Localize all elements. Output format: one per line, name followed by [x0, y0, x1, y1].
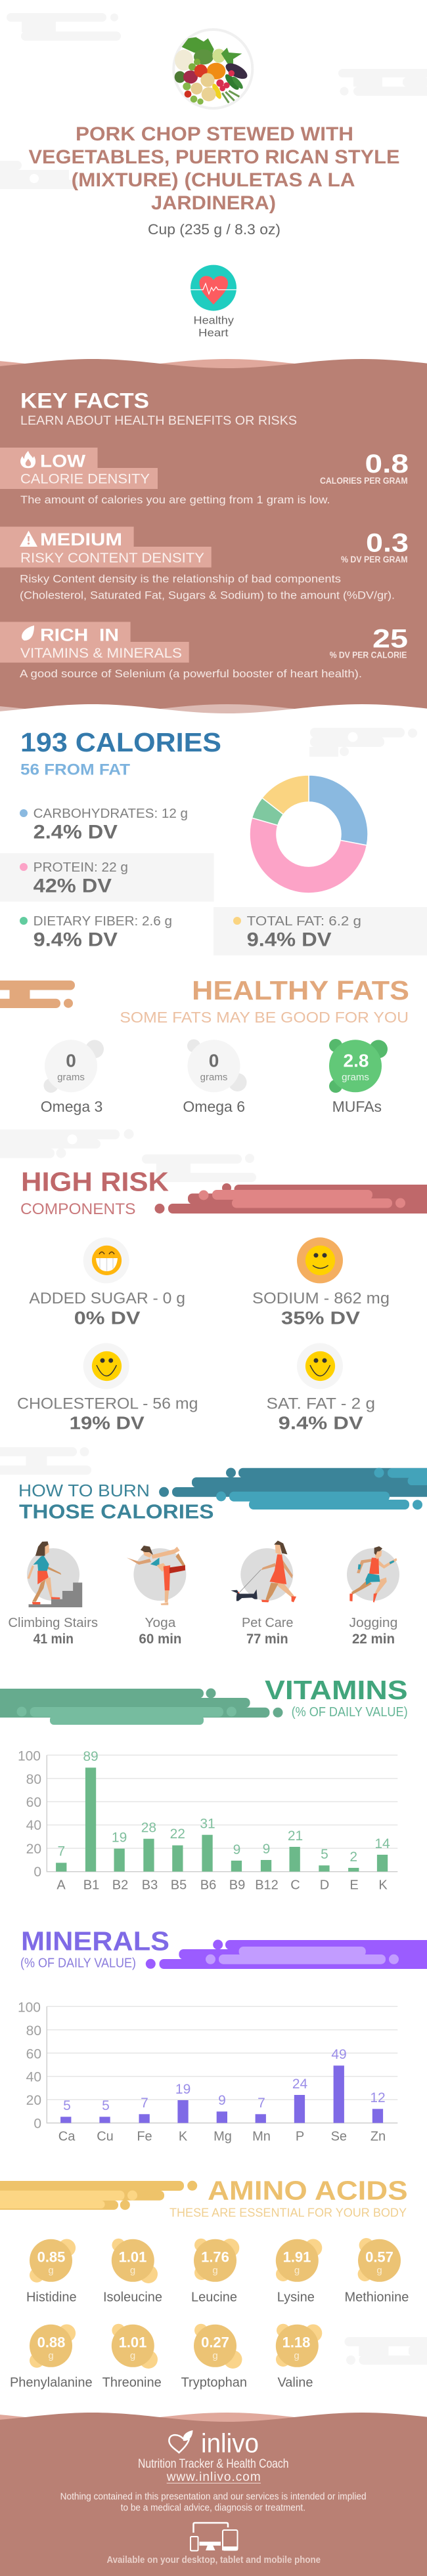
omega 3	[41, 1040, 104, 1115]
legend: total fat	[214, 907, 427, 956]
heading: KEY FACTS	[20, 389, 149, 412]
activity: climbing stairs	[8, 1542, 98, 1647]
title: VEGETABLES, PUERTO RICAN STYLE	[29, 146, 399, 168]
healthy fats subheading: SOME FATS MAY BE GOOD FOR YOU	[120, 1009, 409, 1026]
icon: devices	[191, 2523, 238, 2550]
MUFAs: 2.8	[344, 1050, 369, 1070]
legend: total fat: TOTAL FAT: 6.2 g	[247, 914, 361, 929]
amino acid: methionine: Methionine	[344, 2291, 409, 2305]
omega 6: Omega 6	[183, 1098, 245, 1115]
healthy fats heading: HEALTHY FATS	[192, 975, 409, 1005]
risk: sodium	[252, 1237, 390, 1328]
activity: jogging: 22 min	[352, 1632, 395, 1647]
bar chart: vitamins: 19	[112, 1830, 127, 1846]
bar chart: vitamins: 89	[83, 1749, 99, 1764]
amino acid: valine: Valine	[277, 2376, 313, 2390]
bar chart: vitamins: 2	[349, 1849, 357, 1865]
bar chart: minerals: 0	[34, 2116, 41, 2131]
bar chart: vitamins: 40	[26, 1818, 41, 1833]
burn calories banner shape	[159, 1467, 427, 1510]
tagline: Nutrition Tracker & Health Coach	[138, 2457, 289, 2471]
panel: key facts	[0, 359, 427, 722]
risk: saturated fat	[267, 1343, 375, 1433]
food image	[173, 30, 252, 108]
high risk banner shape	[155, 1183, 427, 1214]
fact: risky content density: (Cholesterol, Saturated Fat, Sugars & Sodium) to the amount (%DV/gr).	[20, 589, 395, 601]
risk: sodium: SODIUM - 862 mg	[252, 1290, 390, 1307]
activity: jogging: Jogging	[349, 1616, 397, 1630]
legend: dietary fiber	[20, 914, 172, 950]
disclaimer: Nothing contained in this presentation and our services is intended or implied	[60, 2491, 367, 2502]
activity: yoga	[127, 1546, 186, 1647]
bar chart: minerals: Cu	[97, 2130, 114, 2144]
badge label: Heart	[198, 327, 229, 339]
legend: total fat: 9.4% DV	[247, 929, 332, 950]
amino acid: histidine: Histidine	[26, 2291, 77, 2305]
amino acid: threonine: Threonine	[102, 2376, 162, 2390]
amino acid: methionine: g	[376, 2265, 382, 2276]
bar chart: minerals: 49	[331, 2047, 347, 2062]
bar chart: minerals: 80	[26, 2023, 41, 2038]
activity: yoga: 60 min	[139, 1632, 181, 1647]
activity: pet care: Pet Care	[242, 1616, 293, 1630]
risk: sodium: 35% DV	[281, 1307, 360, 1328]
vitamins subheading: (% OF DAILY VALUE)	[292, 1705, 408, 1720]
legend: dietary fiber: DIETARY FIBER: 2.6 g	[34, 914, 172, 929]
fact: risky content density: Risky Content density is the relationship of bad components	[20, 572, 341, 585]
fact: risky content density: % DV PER GRAM	[341, 555, 408, 564]
bar chart: vitamins: B2	[112, 1878, 128, 1892]
fact: rich in vitamins and minerals: 25	[372, 624, 408, 653]
fact: calorie density: LOW	[40, 451, 86, 471]
risk: added sugar: 0% DV	[74, 1307, 141, 1328]
amino acids subheading: THESE ARE ESSENTIAL FOR YOUR BODY	[169, 2205, 407, 2219]
amino acid: tryptophan	[181, 2324, 247, 2390]
amino acid: isoleucine: 1.01	[119, 2249, 146, 2266]
serving size: Cup (235 g / 8.3 oz)	[148, 221, 281, 238]
bar chart: minerals: 7	[141, 2096, 148, 2111]
bar chart: minerals: 12	[370, 2090, 386, 2105]
bar chart: vitamins: 28	[141, 1821, 156, 1835]
amino acid: tryptophan: 0.27	[201, 2334, 229, 2351]
bar chart: vitamins: 7	[57, 1844, 65, 1859]
bar chart: vitamins: 21	[288, 1828, 303, 1844]
bar chart: vitamins: B6	[200, 1878, 216, 1892]
amino acid: isoleucine: Isoleucine	[103, 2291, 162, 2305]
bar chart: vitamins: B12	[255, 1878, 279, 1892]
amino acid: leucine	[191, 2239, 239, 2305]
bar chart: minerals: 5	[63, 2098, 71, 2113]
burn calories heading: THOSE CALORIES	[19, 1500, 214, 1523]
bar chart: vitamins: B9	[229, 1878, 245, 1892]
fact: risky content density: 0.3	[366, 529, 409, 558]
activity: jogging	[347, 1546, 399, 1647]
fact: calorie density: The amount of calories you are getting from 1 gram is low.	[20, 494, 330, 506]
bar chart: vitamins: B3	[142, 1878, 158, 1892]
fact: calorie density: CALORIES PER GRAM	[320, 476, 408, 486]
bar chart: minerals: Mn	[252, 2130, 271, 2144]
bar chart: minerals: 100	[18, 2000, 41, 2016]
risk: cholesterol: 19% DV	[70, 1412, 145, 1433]
risk: added sugar	[29, 1237, 185, 1328]
amino acid: histidine	[26, 2239, 77, 2305]
badge label	[193, 315, 235, 339]
risk: cholesterol	[17, 1343, 198, 1433]
bar chart: vitamins: 80	[26, 1772, 41, 1787]
amino acid: lysine	[276, 2239, 322, 2305]
amino acid: leucine: 1.76	[201, 2249, 229, 2266]
MUFAs	[329, 1039, 388, 1115]
disclaimer: to be a medical advice, diagnosis or treatment.	[121, 2502, 305, 2513]
activity: yoga: Yoga	[145, 1616, 176, 1630]
amino acid: histidine: g	[48, 2265, 54, 2276]
amino acid: valine: g	[294, 2350, 300, 2361]
amino acid: leucine: Leucine	[191, 2291, 237, 2305]
amino acid: phenylalanine: g	[48, 2350, 54, 2361]
bar chart: minerals: K	[179, 2130, 188, 2144]
calories heading: 193 CALORIES	[20, 727, 221, 757]
fact: rich in vitamins and minerals: % DV PER CALORIE	[330, 650, 407, 660]
amino acid: threonine: g	[130, 2350, 135, 2361]
amino acids heading: AMINO ACIDS	[208, 2176, 408, 2206]
bar chart: minerals: Se	[331, 2130, 347, 2144]
availability note: Available on your desktop, tablet and mobile phone	[106, 2554, 321, 2565]
amino acid: isoleucine	[103, 2239, 162, 2305]
bar chart: vitamins	[18, 1749, 397, 1892]
fact: rich in vitamins and minerals: VITAMINS & MINERALS	[20, 646, 182, 661]
amino acid: lysine: Lysine	[277, 2291, 315, 2305]
minerals heading: MINERALS	[21, 1926, 169, 1956]
risk: cholesterol: CHOLESTEROL - 56 mg	[17, 1395, 198, 1412]
burn calories heading: HOW TO BURN	[18, 1481, 150, 1500]
vitamins heading: VITAMINS	[265, 1675, 408, 1705]
amino acid: tryptophan: Tryptophan	[181, 2376, 247, 2390]
bar chart: minerals: Zn	[371, 2130, 386, 2144]
activity: climbing stairs: 41 min	[34, 1632, 74, 1647]
activity: pet care	[231, 1540, 296, 1647]
high risk subheading: COMPONENTS	[20, 1200, 135, 1218]
figure: woman in yoga pose	[127, 1546, 185, 1605]
bar chart: vitamins: B1	[83, 1878, 99, 1892]
bar chart: minerals: 9	[218, 2093, 226, 2108]
title	[29, 123, 399, 214]
fact: calorie density: CALORIE DENSITY	[20, 471, 150, 486]
title: (MIXTURE) (CHULETAS A LA	[72, 169, 355, 191]
calories from fat: 56 FROM FAT	[20, 761, 130, 779]
bar chart: vitamins: E	[349, 1878, 359, 1892]
figure: man jogging	[349, 1546, 397, 1603]
amino acid: methionine	[344, 2238, 409, 2305]
legend: carbohydrates	[20, 806, 188, 843]
amino acid: phenylalanine: Phenylalanine	[10, 2376, 93, 2390]
bar chart: minerals: Ca	[58, 2130, 76, 2144]
legend: protein	[0, 853, 214, 902]
bar chart: vitamins: 22	[170, 1826, 185, 1842]
amino acid: threonine: 1.01	[119, 2334, 146, 2351]
amino acid: methionine: 0.57	[365, 2249, 393, 2266]
omega 6	[183, 1040, 247, 1115]
website: www.inlivo.com	[166, 2470, 261, 2484]
omega 6: 0	[209, 1050, 219, 1070]
bar chart: vitamins: 20	[26, 1842, 41, 1857]
badge label: Healthy	[193, 315, 235, 327]
title: JARDINERA)	[151, 192, 276, 214]
minerals banner shape	[146, 1940, 427, 1969]
legend: protein: 42% DV	[34, 875, 112, 897]
bar chart: vitamins: A	[56, 1878, 66, 1892]
logo wordmark: inlivo	[201, 2428, 259, 2459]
figure: woman walking dog	[231, 1540, 296, 1602]
amino acid: lysine: 1.91	[283, 2249, 311, 2266]
omega 3: Omega 3	[41, 1098, 102, 1115]
icon: warning	[20, 531, 37, 547]
logo: inlivo heart and leaf	[169, 2430, 193, 2453]
amino acids banner shape	[0, 2181, 197, 2210]
fact: rich in vitamins and minerals	[0, 622, 408, 680]
bar chart: vitamins: 0	[34, 1865, 41, 1880]
healthy fats banner shape	[0, 981, 75, 1008]
bar chart: minerals: 40	[26, 2070, 41, 2085]
icon: flame	[20, 451, 35, 468]
bar chart: vitamins: D	[320, 1878, 329, 1892]
bar chart: minerals: Mg	[214, 2130, 232, 2144]
bar chart: vitamins: 14	[374, 1836, 390, 1851]
MUFAs: MUFAs	[332, 1098, 382, 1115]
title: PORK CHOP STEWED WITH	[76, 123, 353, 145]
bar chart: vitamins: 31	[200, 1817, 215, 1831]
bar chart: minerals	[18, 2000, 397, 2144]
risk: saturated fat: SAT. FAT - 2 g	[267, 1395, 375, 1412]
bar chart: vitamins: 9	[263, 1842, 270, 1857]
legend: protein: PROTEIN: 22 g	[34, 860, 128, 875]
bar chart: vitamins: 9	[233, 1842, 240, 1857]
disclaimer	[60, 2491, 367, 2513]
bar chart: minerals: 5	[102, 2098, 110, 2113]
fact: rich in vitamins and minerals: RICH IN	[40, 625, 119, 644]
icon: leaf	[22, 625, 34, 641]
activity: climbing stairs: Climbing Stairs	[8, 1616, 98, 1630]
amino acid: tryptophan: g	[212, 2350, 218, 2361]
fact: risky content density: RISKY CONTENT DENSITY	[20, 551, 204, 566]
donut chart	[250, 775, 368, 893]
panel: footer	[0, 2413, 427, 2576]
bar chart: vitamins: C	[290, 1878, 300, 1892]
risk: saturated fat: 9.4% DV	[279, 1412, 363, 1433]
bar chart: minerals: 20	[26, 2093, 41, 2108]
vitamins banner shape	[0, 1688, 282, 1725]
omega 3: grams	[57, 1072, 85, 1083]
bar chart: minerals: 7	[258, 2096, 265, 2111]
legend: carbohydrates: 2.4% DV	[34, 821, 118, 843]
bar chart: vitamins: 100	[18, 1749, 41, 1764]
amino acid: lysine: g	[294, 2265, 300, 2276]
bar chart: vitamins: 5	[321, 1847, 328, 1862]
fact: risky content density	[0, 526, 409, 601]
amino acid: valine	[276, 2324, 322, 2390]
amino acid: isoleucine: g	[130, 2265, 135, 2276]
bar chart: minerals: 19	[175, 2082, 191, 2097]
amino acid: valine: 1.18	[282, 2334, 310, 2351]
risk: added sugar: ADDED SUGAR - 0 g	[29, 1290, 185, 1307]
activity: pet care: 77 min	[246, 1632, 288, 1647]
high risk heading: HIGH RISK	[21, 1167, 169, 1197]
fact: rich in vitamins and minerals: A good source of Selenium (a powerful booster of heart health).	[20, 667, 362, 680]
fact: calorie density: 0.8	[365, 450, 409, 478]
bar chart: minerals: Fe	[137, 2130, 152, 2144]
minerals subheading: (% OF DAILY VALUE)	[20, 1956, 136, 1970]
omega 6: grams	[200, 1072, 227, 1083]
amino acid: threonine	[102, 2324, 162, 2390]
legend: dietary fiber: 9.4% DV	[34, 929, 118, 950]
fact: risky content density: MEDIUM	[40, 530, 122, 549]
amino acid: leucine: g	[212, 2265, 218, 2276]
omega 3: 0	[66, 1050, 76, 1070]
amino acid: histidine: 0.85	[37, 2249, 65, 2266]
figure: woman on stairs	[27, 1542, 82, 1607]
bar chart: vitamins: B5	[171, 1878, 187, 1892]
subheading: LEARN ABOUT HEALTH BENEFITS OR RISKS	[20, 413, 297, 428]
bar chart: minerals: 24	[292, 2077, 307, 2092]
bar chart: minerals: 60	[26, 2046, 41, 2061]
burn calories heading	[18, 1481, 214, 1523]
bar chart: minerals: P	[296, 2130, 304, 2144]
icon: healthy heart	[191, 265, 236, 311]
fact: calorie density	[0, 448, 409, 506]
bar chart: vitamins: K	[378, 1878, 388, 1892]
MUFAs: grams	[342, 1072, 369, 1083]
amino acid: phenylalanine: 0.88	[37, 2334, 65, 2351]
legend: carbohydrates: CARBOHYDRATES: 12 g	[34, 806, 188, 821]
bar chart: vitamins: 60	[26, 1795, 41, 1810]
amino acid: phenylalanine	[10, 2325, 93, 2390]
